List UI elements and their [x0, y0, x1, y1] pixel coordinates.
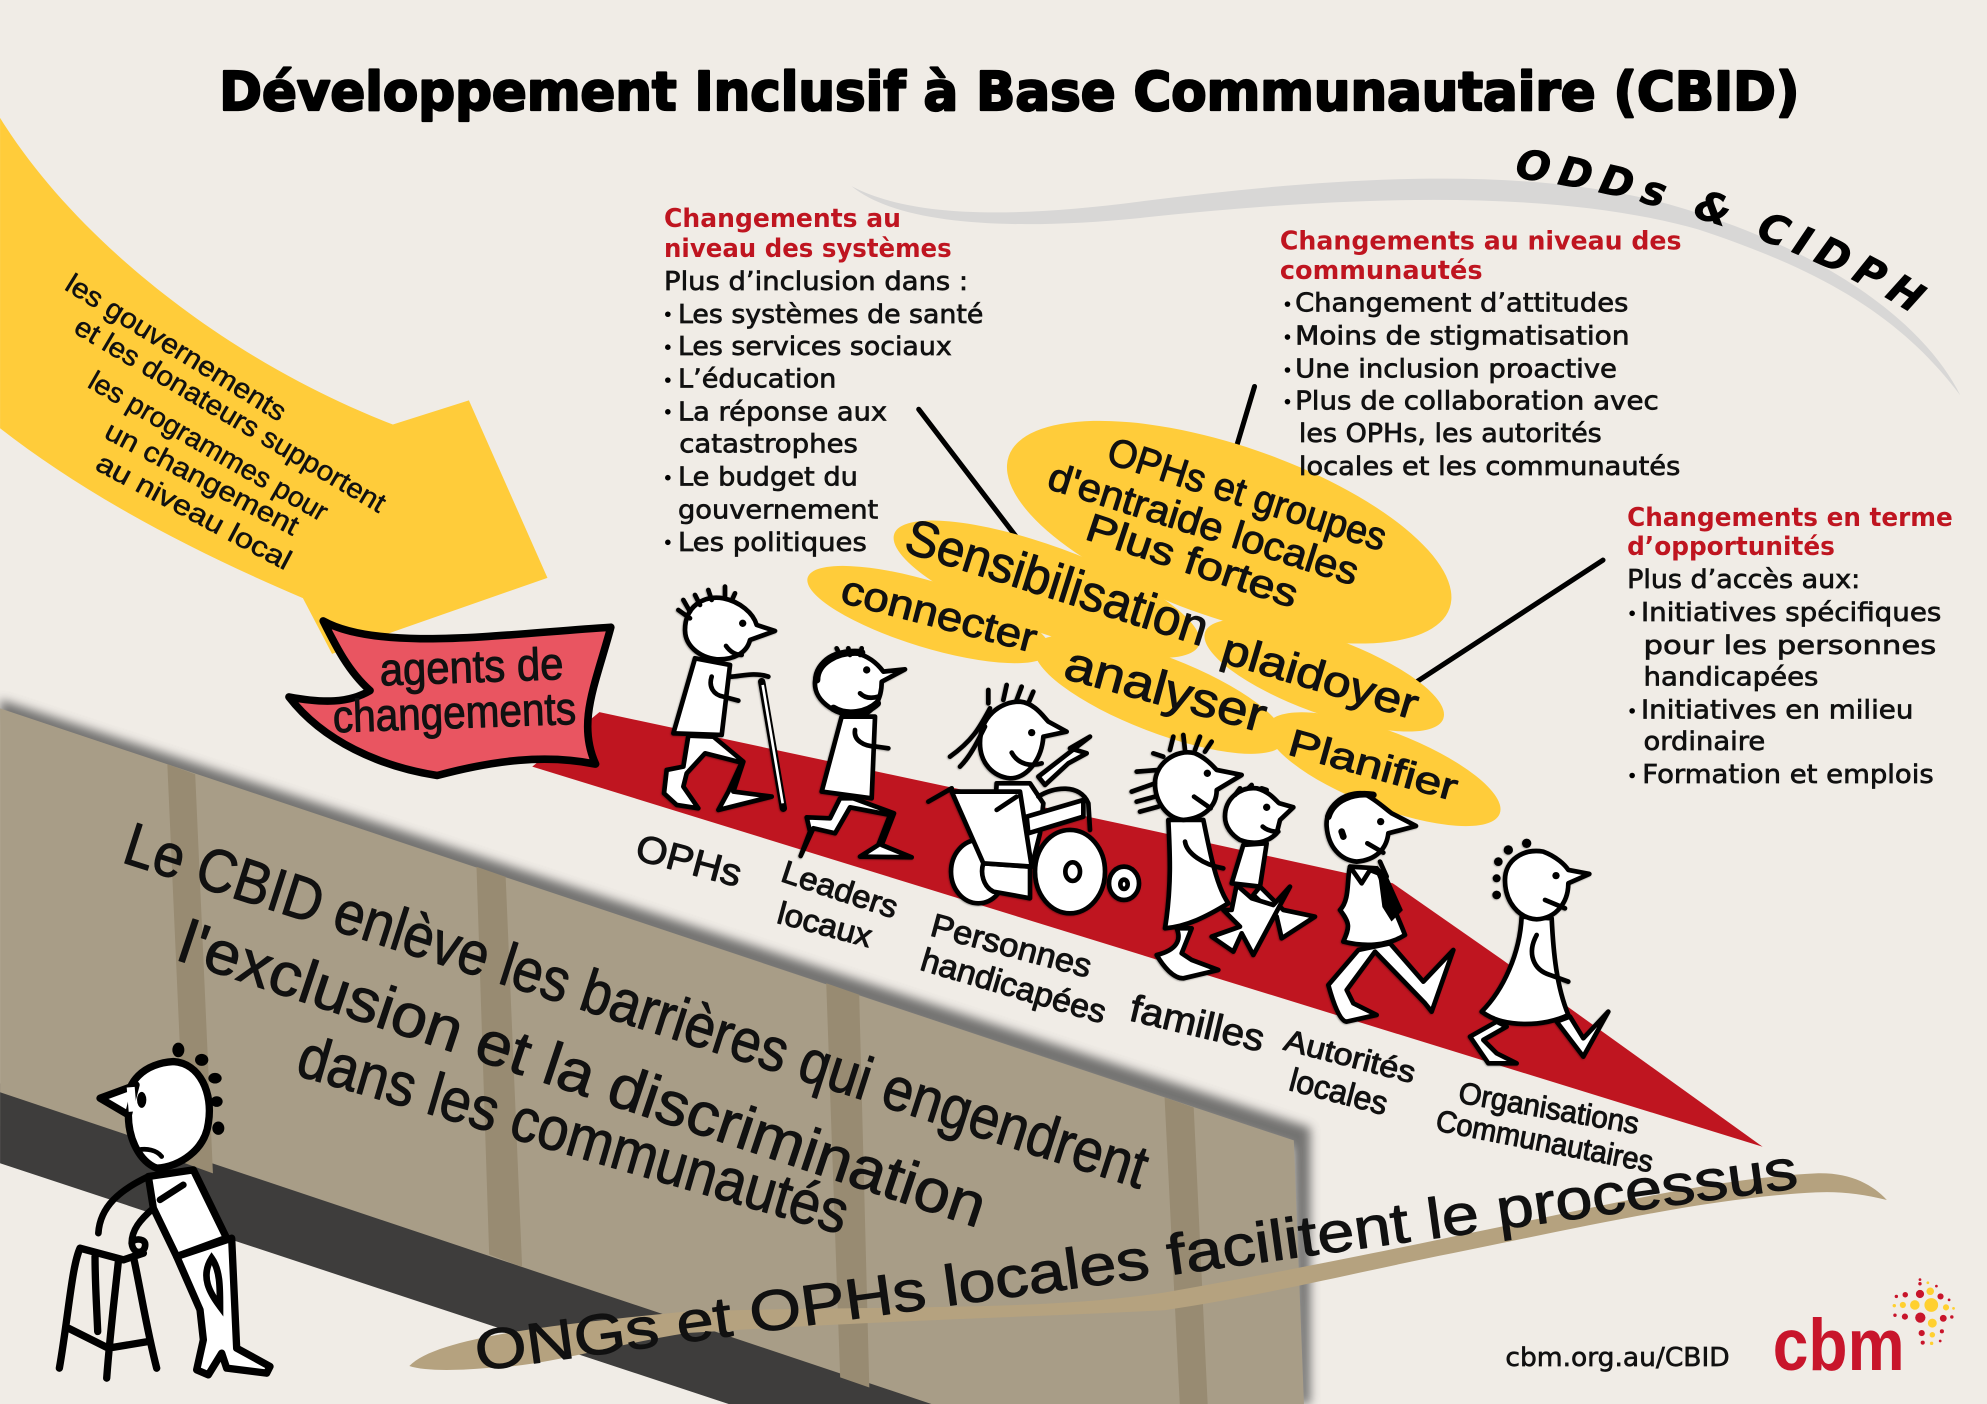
connector lines: [919, 386, 1603, 687]
cbm logo: cbm: [1773, 1303, 1905, 1386]
person labels: OPHs: [631, 827, 746, 896]
person labels: Organisations: [1456, 1076, 1642, 1141]
person: family mother and child: [1132, 735, 1315, 978]
text block: opportunités: d’opportunités: [1627, 531, 1835, 561]
wall shadow: [0, 699, 1310, 1404]
yellow arrow: [0, 118, 547, 654]
text block: systèmes: gouvernement: [678, 494, 878, 524]
logo dots: [1893, 1278, 1955, 1345]
text block: opportunités: Plus d’accès aux:: [1627, 564, 1860, 594]
oval: OPHs et groupes: Plus fortes: [1081, 505, 1304, 617]
person labels: Leaders: [777, 853, 903, 925]
person labels: locaux: [774, 894, 876, 954]
heading: ODDs & CIDPH: ODDs & CIDPH: [1516, 150, 1928, 311]
person labels: Communautaires: [1433, 1104, 1656, 1179]
text block: communautés: communautés: [1280, 255, 1483, 285]
text block: systèmes: Plus d’inclusion dans :: [664, 266, 968, 296]
text block: communautés: locales et les communautés: [1299, 451, 1680, 481]
banner: agents de changements: changements: [332, 683, 577, 742]
text block: systèmes: Les services sociaux: [678, 331, 952, 361]
text block: communautés: Plus de collaboration avec: [1295, 385, 1659, 415]
arrow text: et les donateurs supportent: [69, 310, 392, 519]
oval: OPHs et groupes: OPHs et groupes: [1102, 429, 1392, 560]
person: excluded person with walker: [59, 1043, 270, 1378]
title: Développement Inclusif à Base Communautaire (CBID): [219, 61, 1799, 123]
banner: agents de changements: [289, 621, 611, 775]
red path: [532, 712, 1763, 1147]
text block: systèmes: La réponse aux: [678, 397, 887, 427]
yellow ovals: [798, 375, 1513, 849]
person labels: locales: [1286, 1061, 1392, 1122]
bottom text: ONGs et OPHs locales facilitent le processus: [471, 1137, 1801, 1384]
text block: communautés: [1280, 226, 1682, 481]
wall text: Le CBID enlève les barrières qui engendrent: [116, 809, 1157, 1201]
text block: communautés: Moins de stigmatisation: [1295, 321, 1630, 351]
oval: plaidoyer: plaidoyer: [1216, 625, 1424, 729]
text block: systèmes: catastrophes: [679, 428, 858, 458]
text block: systèmes: Les politiques: [678, 527, 867, 557]
person labels: [631, 827, 1656, 1179]
text block: opportunités: Initiatives en milieu: [1641, 694, 1913, 724]
person labels: handicapées: [917, 941, 1111, 1030]
oval: plaidoyer: [1192, 596, 1456, 754]
text block: communautés: Changement d’attitudes: [1295, 288, 1628, 318]
curved grey swoosh: [852, 179, 1960, 395]
person: wheelchair user: [928, 685, 1139, 913]
person labels: Personnes: [927, 906, 1096, 985]
arrow text: au niveau local: [91, 447, 297, 576]
wall: [0, 708, 1304, 1404]
arrow text: un changement: [100, 415, 304, 541]
website link: cbm.org.au/CBID: [1505, 1342, 1730, 1372]
text block: systèmes: [664, 203, 983, 557]
oval: sensibilisation: Sensibilisation: [899, 507, 1216, 657]
oval: planifier: [1254, 689, 1513, 849]
person: local authority: [1327, 793, 1453, 1022]
person: local leader: [801, 648, 912, 857]
cbm logo: [1773, 1278, 1955, 1386]
person: community organisation: [1470, 839, 1608, 1063]
arrow text: les programmes pour: [83, 365, 334, 527]
text block: communautés: Une inclusion proactive: [1295, 354, 1617, 384]
oval: connecter: [798, 546, 1060, 683]
text block: opportunités: [1627, 502, 1953, 789]
text block: communautés: Changements au niveau des: [1280, 226, 1682, 256]
text block: opportunités: Formation et emplois: [1642, 759, 1934, 789]
text block: opportunités: Initiatives spécifiques: [1641, 597, 1941, 627]
text block: systèmes: Changements au: [664, 203, 901, 233]
wall text: l'exclusion et la discrimination: [171, 907, 995, 1240]
text block: systèmes: Les systèmes de santé: [678, 299, 983, 329]
arrow text: les gouvernements: [60, 268, 292, 427]
people group B: [1132, 735, 1608, 1063]
text block: opportunités: ordinaire: [1644, 726, 1765, 756]
dark band: wall ground shadow: [0, 1083, 963, 1404]
oval: planifier: Planifier: [1284, 722, 1463, 810]
text block: opportunités: handicapées: [1644, 662, 1818, 692]
text block: opportunités: Changements en terme: [1627, 502, 1953, 532]
person labels: Autorités: [1281, 1023, 1419, 1090]
person labels: familles: [1126, 988, 1269, 1061]
oval: OPHs et groupes: d'entraide locales: [1043, 454, 1364, 594]
text block: systèmes: Le budget du: [678, 461, 858, 491]
text block: communautés: les OPHs, les autorités: [1299, 418, 1602, 448]
text block: opportunités: pour les personnes: [1644, 630, 1936, 660]
wall text: dans les communautés: [290, 1022, 857, 1247]
people group A: [664, 587, 1139, 913]
person: OPH with cane: [664, 587, 783, 810]
oval: connecter: connecter: [837, 566, 1042, 661]
text block: systèmes: niveau des systèmes: [664, 233, 952, 263]
banner: agents de changements: agents de: [379, 638, 564, 696]
arrow text: [60, 268, 392, 576]
oval: analyser: analyser: [1059, 636, 1272, 743]
oval: OPHs et groupes: [981, 375, 1478, 690]
bottom swoosh: [409, 1173, 1887, 1370]
text block: systèmes: L’éducation: [678, 364, 836, 394]
oval: analyser: [1022, 611, 1297, 778]
